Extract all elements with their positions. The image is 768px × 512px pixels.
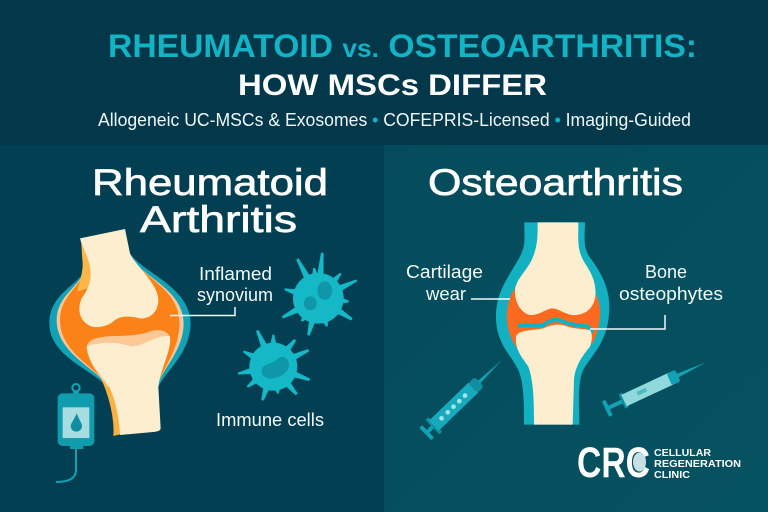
heading: rheumatoid arthritis: Rheumatoid <box>92 162 328 203</box>
logo: cellular regeneration clinic: CELLULAR <box>654 447 711 459</box>
label: cartilage wear <box>406 262 510 304</box>
label: cartilage wear: Cartilage <box>406 262 483 282</box>
subtitle: Allogeneic UC-MSCs & Exosomes • COFEPRIS-Licensed • Imaging-Guided <box>98 110 691 130</box>
illustration: inflamed knee joint <box>49 229 191 436</box>
icon: immune cell lower <box>238 330 310 401</box>
label: immune cells: Immune cells <box>216 410 324 430</box>
header band <box>0 0 768 145</box>
label: cartilage wear: wear <box>425 284 466 304</box>
logo: cellular regeneration clinic: CRC <box>577 439 650 487</box>
label: bone osteophytes: Bone <box>645 262 687 282</box>
logo: cellular regeneration clinic <box>577 439 741 487</box>
title: RHEUMATOID vs. OSTEOARTHRITIS: <box>108 28 697 64</box>
title: HOW MSCs DIFFER <box>238 69 547 102</box>
icon: syringe right <box>602 354 710 417</box>
icon: IV bag <box>56 384 94 482</box>
heading: osteoarthritis: Osteoarthritis <box>428 162 683 203</box>
title <box>108 28 697 102</box>
heading: rheumatoid arthritis: Arthritis <box>140 199 297 240</box>
heading: rheumatoid arthritis <box>92 162 328 240</box>
logo: cellular regeneration clinic: CLINIC <box>654 469 690 481</box>
panel: osteoarthritis <box>384 145 768 512</box>
label: bone osteophytes: osteophytes <box>619 284 723 304</box>
label: bone osteophytes <box>590 262 723 329</box>
label: inflamed synovium: Inflamed <box>199 264 272 284</box>
icon: syringe left <box>418 353 509 441</box>
logo: cellular regeneration clinic: REGENERATION <box>654 458 741 470</box>
label: inflamed synovium <box>170 264 273 316</box>
label: inflamed synovium: synovium <box>197 285 273 305</box>
icon: immune cell upper <box>281 253 358 336</box>
illustration: worn knee joint <box>496 222 609 425</box>
panel: rheumatoid arthritis <box>0 145 384 512</box>
